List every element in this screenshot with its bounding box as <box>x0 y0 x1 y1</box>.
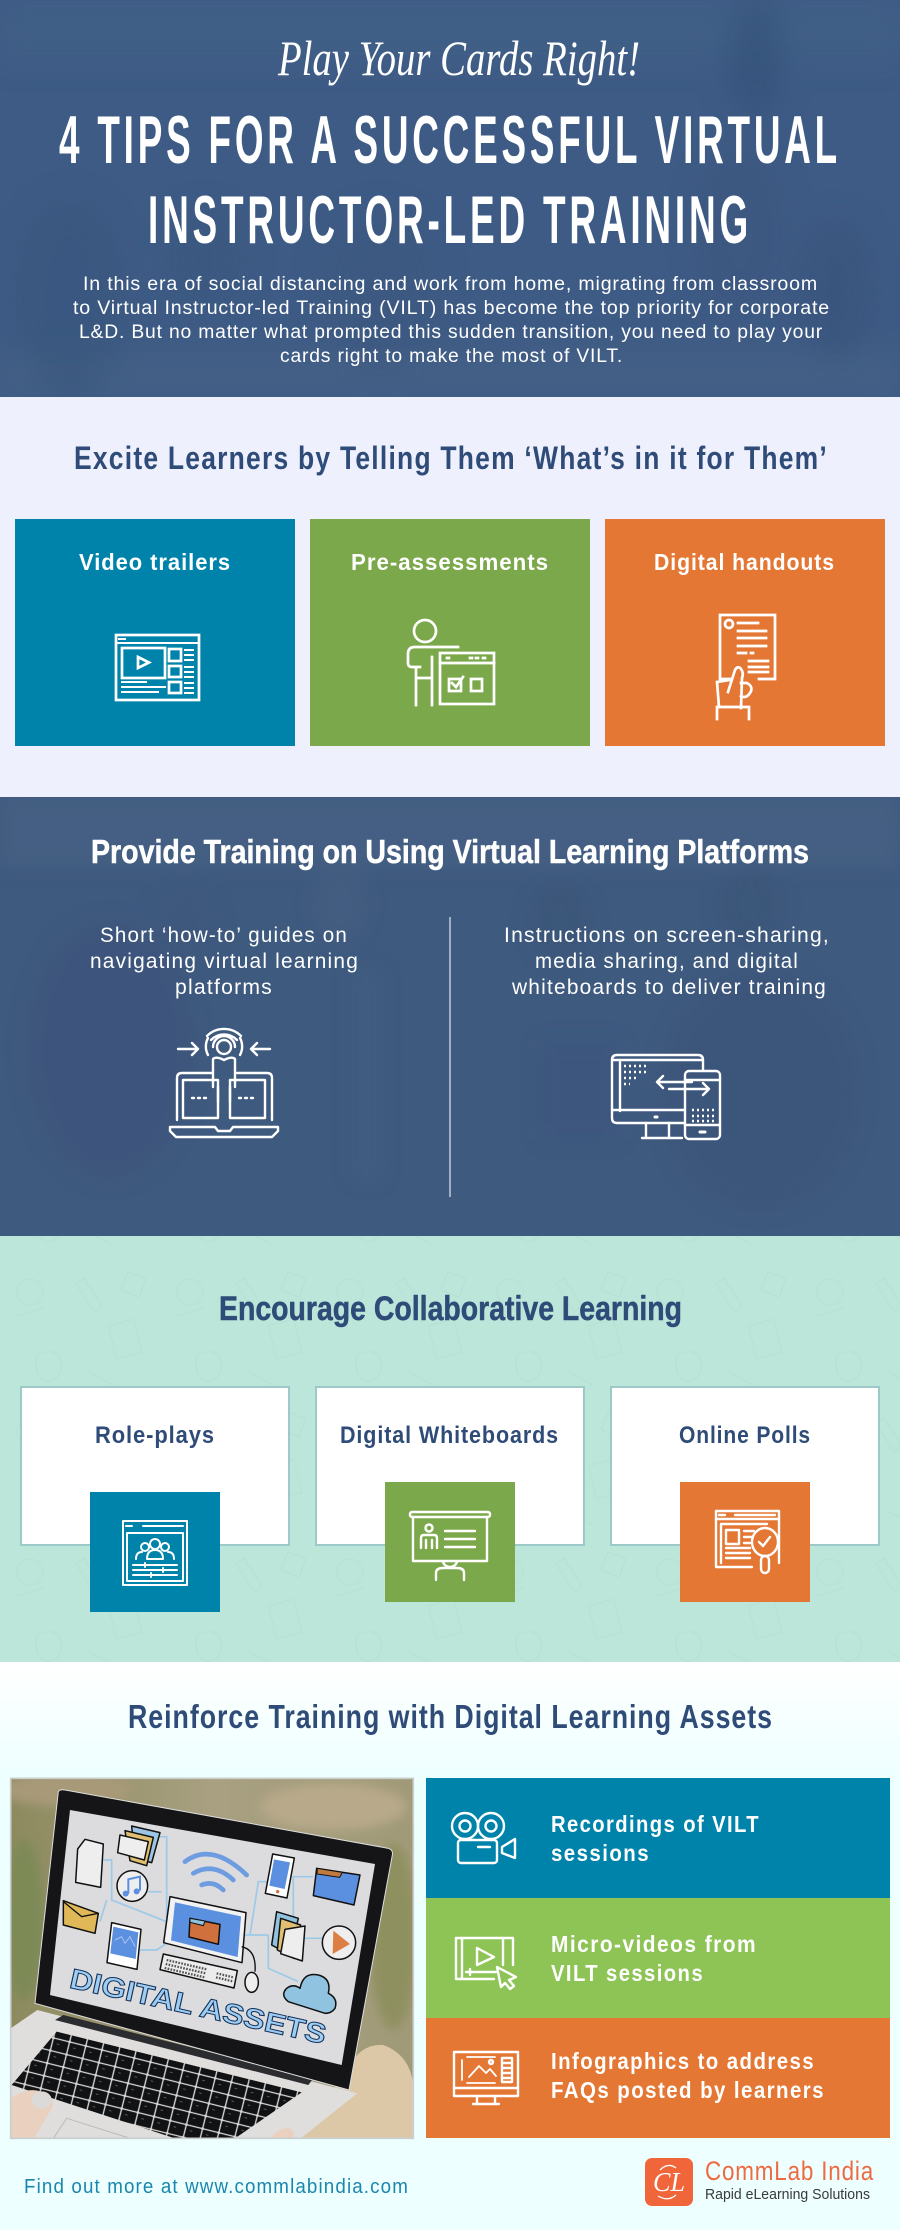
text: how-to guides: navigating virtual learning <box>90 950 359 973</box>
logo: CommLab India: Rapid eLearning Solutions <box>705 2186 870 2203</box>
icon: presentation board <box>410 1512 490 1580</box>
card: pre-assessments: Pre-assessments <box>351 549 549 575</box>
laptop base <box>11 2010 357 2138</box>
card: role-plays: Role-plays <box>95 1422 215 1449</box>
icon: window with magnifier <box>716 1511 779 1573</box>
heading: collaborative learning: Encourage Collaborative Learning <box>219 1290 682 1328</box>
blue folder <box>313 1868 360 1905</box>
keyboard <box>12 2032 302 2138</box>
row: recordings: Recordings of VILT <box>551 1811 760 1837</box>
cloud <box>284 1974 336 2013</box>
thigh <box>300 2045 413 2138</box>
computer <box>164 1897 246 1963</box>
icon: monitor with chart <box>454 2052 518 2104</box>
card: digital whiteboards <box>316 1387 584 1602</box>
wifi <box>185 1854 247 1890</box>
script subtitle: Play Your Cards Right! <box>277 30 640 86</box>
music circle <box>117 1871 148 1901</box>
screen label text: DIGITAL ASSETS <box>67 1963 329 2050</box>
row: infographics <box>426 2018 890 2138</box>
intro paragraph <box>73 274 830 367</box>
panel: excite learners <box>0 397 900 797</box>
header photo background <box>0 0 900 400</box>
panel: collaborative learning <box>0 1236 900 1662</box>
icon: people window <box>123 1521 187 1585</box>
heading: provide training: Provide Training on Using Virtual Learning Platforms <box>91 833 809 870</box>
mouse <box>242 1947 255 1972</box>
icon: presenter on laptop <box>170 1029 278 1137</box>
card: digital handouts: Digital handouts <box>654 549 835 575</box>
icon: monitor and phone <box>612 1055 720 1139</box>
trackpad <box>53 2118 130 2138</box>
hand right <box>270 2128 294 2138</box>
icon: video window <box>116 635 199 700</box>
row: infographics: FAQs posted by learners <box>551 2077 825 2103</box>
tablet <box>107 1923 141 1969</box>
row: micro-videos: Micro-videos from <box>551 1931 757 1957</box>
screen <box>50 1810 375 2065</box>
card: role-plays <box>21 1387 289 1612</box>
card: pre-assessments <box>310 519 590 746</box>
logo: CommLab India: CL <box>653 2167 685 2197</box>
title <box>59 102 841 258</box>
divider line <box>449 917 451 1197</box>
folder stack <box>132 1826 160 1863</box>
icon: person and window <box>408 620 494 705</box>
text: screen-sharing instructions: Instructions on screen-sharing, <box>504 924 830 947</box>
document icon <box>76 1839 103 1887</box>
training photo background <box>0 797 900 1236</box>
card: online polls <box>611 1387 879 1602</box>
icon: hand holding document <box>717 615 775 719</box>
connector lines <box>100 1837 323 1982</box>
text: screen-sharing instructions <box>504 924 830 999</box>
panel: digital assets <box>0 1662 900 2230</box>
panel: provide training <box>0 797 900 1236</box>
row: infographics: Infographics to address <box>551 2048 815 2074</box>
text: how-to guides: platforms <box>175 976 273 999</box>
intro paragraph: In this era of social distancing and work from home, migrating from classroom <box>83 274 818 295</box>
text: screen-sharing instructions: whiteboards to deliver training <box>511 976 827 999</box>
hand left <box>11 2090 53 2138</box>
intro paragraph: cards right to make the most of VILT. <box>280 346 623 367</box>
play circle <box>322 1926 356 1959</box>
footer link: Find out more at www.commlabindia.com <box>24 2176 409 2198</box>
text: screen-sharing instructions: media sharing, and digital <box>535 950 799 973</box>
row: recordings: sessions <box>551 1840 650 1866</box>
card: digital whiteboards: Digital Whiteboards <box>340 1422 559 1449</box>
card: digital handouts <box>605 519 885 746</box>
lid <box>35 1790 392 2090</box>
card: video trailers <box>15 519 295 746</box>
row: micro-videos: VILT sessions <box>551 1960 704 1986</box>
intro paragraph: L&D. But no matter what prompted this sudden transition, you need to play your <box>79 322 823 343</box>
logo: CommLab India <box>645 2156 874 2206</box>
text: how-to guides <box>90 924 359 999</box>
icon: film camera <box>452 1813 515 1863</box>
row: micro-videos <box>426 1898 890 2018</box>
phone <box>265 1854 294 1898</box>
envelope <box>63 1901 98 1933</box>
text: how-to guides: Short ‘how-to’ guides on <box>100 924 348 947</box>
card: video trailers: Video trailers <box>79 549 231 575</box>
row: recordings <box>426 1778 890 1898</box>
card: online polls: Online Polls <box>679 1422 811 1449</box>
icon: video with cursor <box>456 1938 516 1989</box>
document stack <box>272 1912 298 1955</box>
image: laptop showing digital assets <box>0 1773 417 2138</box>
intro paragraph: to Virtual Instructor-led Training (VILT) has become the top priority for corporate <box>73 298 830 319</box>
panel: header <box>0 0 900 400</box>
